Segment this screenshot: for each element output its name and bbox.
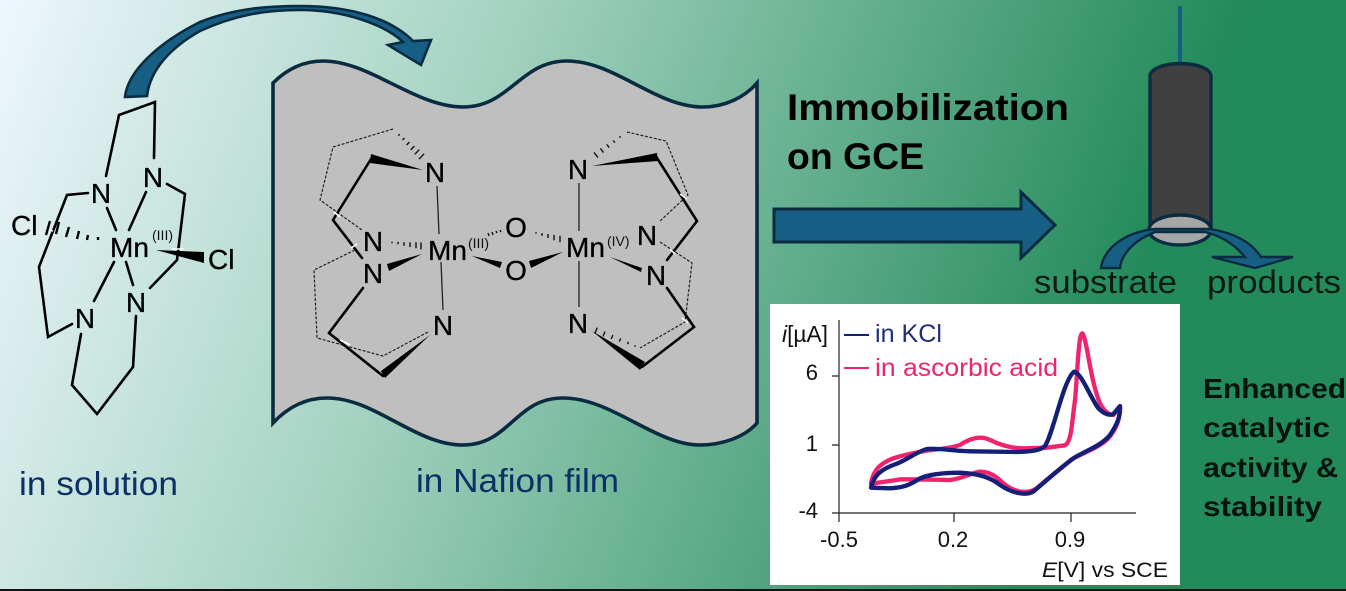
- arrow: solution to film: [125, 6, 431, 97]
- chart: cyclic voltammogram: 0.2: [938, 527, 968, 552]
- molecule: Mn(III) complex in solution: N: [143, 162, 163, 193]
- chart: cyclic voltammogram: 6: [806, 360, 818, 385]
- molecule: Mn(III)-Mn(IV) dimer in film: N: [568, 154, 588, 185]
- text: Enhanced catalytic activity & stability: Enhanced: [1203, 373, 1346, 404]
- molecule: Mn(III) complex in solution: N: [75, 303, 95, 334]
- chart: cyclic voltammogram: i[µA]: [782, 321, 828, 347]
- molecule: Mn(III)-Mn(IV) dimer in film: N: [568, 308, 588, 339]
- molecule: Mn(III)-Mn(IV) dimer in film: N: [433, 310, 453, 341]
- heading: Immobilization on GCE: on GCE: [787, 136, 924, 177]
- label: substrate: substrate: [1034, 264, 1177, 300]
- icon: glassy carbon electrode: [1149, 6, 1211, 245]
- molecule: Mn(III)-Mn(IV) dimer in film: N: [363, 226, 383, 257]
- chart: cyclic voltammogram: -0.5: [820, 527, 858, 552]
- arrow: substrate to products: [1101, 229, 1293, 268]
- molecule: Mn(III)-Mn(IV) dimer in film: N: [646, 260, 666, 291]
- molecule: Mn(III)-Mn(IV) dimer in film: Mn: [566, 232, 605, 263]
- panel: Nafion film: [273, 61, 757, 445]
- chart: cyclic voltammogram: [770, 304, 1180, 585]
- label: in solution: in solution: [19, 465, 178, 502]
- molecule: Mn(III) complex in solution: N: [126, 287, 146, 318]
- text: Enhanced catalytic activity & stability: activity &: [1203, 452, 1338, 483]
- arrow: to electrode: [774, 192, 1055, 258]
- chart: cyclic voltammogram: in ascorbic acid: [875, 354, 1058, 382]
- molecule: Mn(III) complex in solution: [11, 102, 234, 414]
- molecule: Mn(III) complex in solution: Cl: [11, 210, 37, 241]
- molecule: Mn(III) complex in solution: (III): [152, 227, 173, 243]
- molecule: Mn(III) complex in solution: N: [91, 178, 111, 209]
- text: Enhanced catalytic activity & stability: stability: [1203, 491, 1322, 522]
- molecule: Mn(III)-Mn(IV) dimer in film: N: [425, 157, 445, 188]
- label: products: products: [1207, 264, 1341, 300]
- label: in Nafion film: in Nafion film: [416, 462, 619, 499]
- bottom border line: [0, 589, 1346, 591]
- chart: cyclic voltammogram: 1: [806, 431, 818, 456]
- molecule: Mn(III)-Mn(IV) dimer in film: [314, 129, 697, 378]
- text: Enhanced catalytic activity & stability: catalytic: [1203, 412, 1330, 443]
- molecule: Mn(III)-Mn(IV) dimer in film: Mn: [428, 235, 467, 266]
- chart: cyclic voltammogram: in KCl: [875, 320, 942, 348]
- chart: cyclic voltammogram: E[V] vs SCE: [1042, 559, 1168, 582]
- heading: Immobilization on GCE: Immobilization: [787, 87, 1069, 128]
- molecule: Mn(III)-Mn(IV) dimer in film: N: [363, 258, 383, 289]
- molecule: Mn(III)-Mn(IV) dimer in film: N: [637, 220, 657, 251]
- molecule: Mn(III)-Mn(IV) dimer in film: O: [505, 212, 527, 243]
- heading: Immobilization on GCE: [787, 87, 1069, 177]
- chart: cyclic voltammogram: -4: [798, 498, 818, 523]
- molecule: Mn(III) complex in solution: Cl: [208, 244, 234, 275]
- text: Enhanced catalytic activity & stability: [1203, 373, 1346, 522]
- molecule: Mn(III) complex in solution: Mn: [110, 232, 149, 263]
- chart: cyclic voltammogram: 0.9: [1055, 527, 1085, 552]
- molecule: Mn(III)-Mn(IV) dimer in film: O: [505, 255, 527, 286]
- molecule: Mn(III)-Mn(IV) dimer in film: (III): [468, 235, 489, 251]
- molecule: Mn(III)-Mn(IV) dimer in film: (IV): [607, 233, 630, 249]
